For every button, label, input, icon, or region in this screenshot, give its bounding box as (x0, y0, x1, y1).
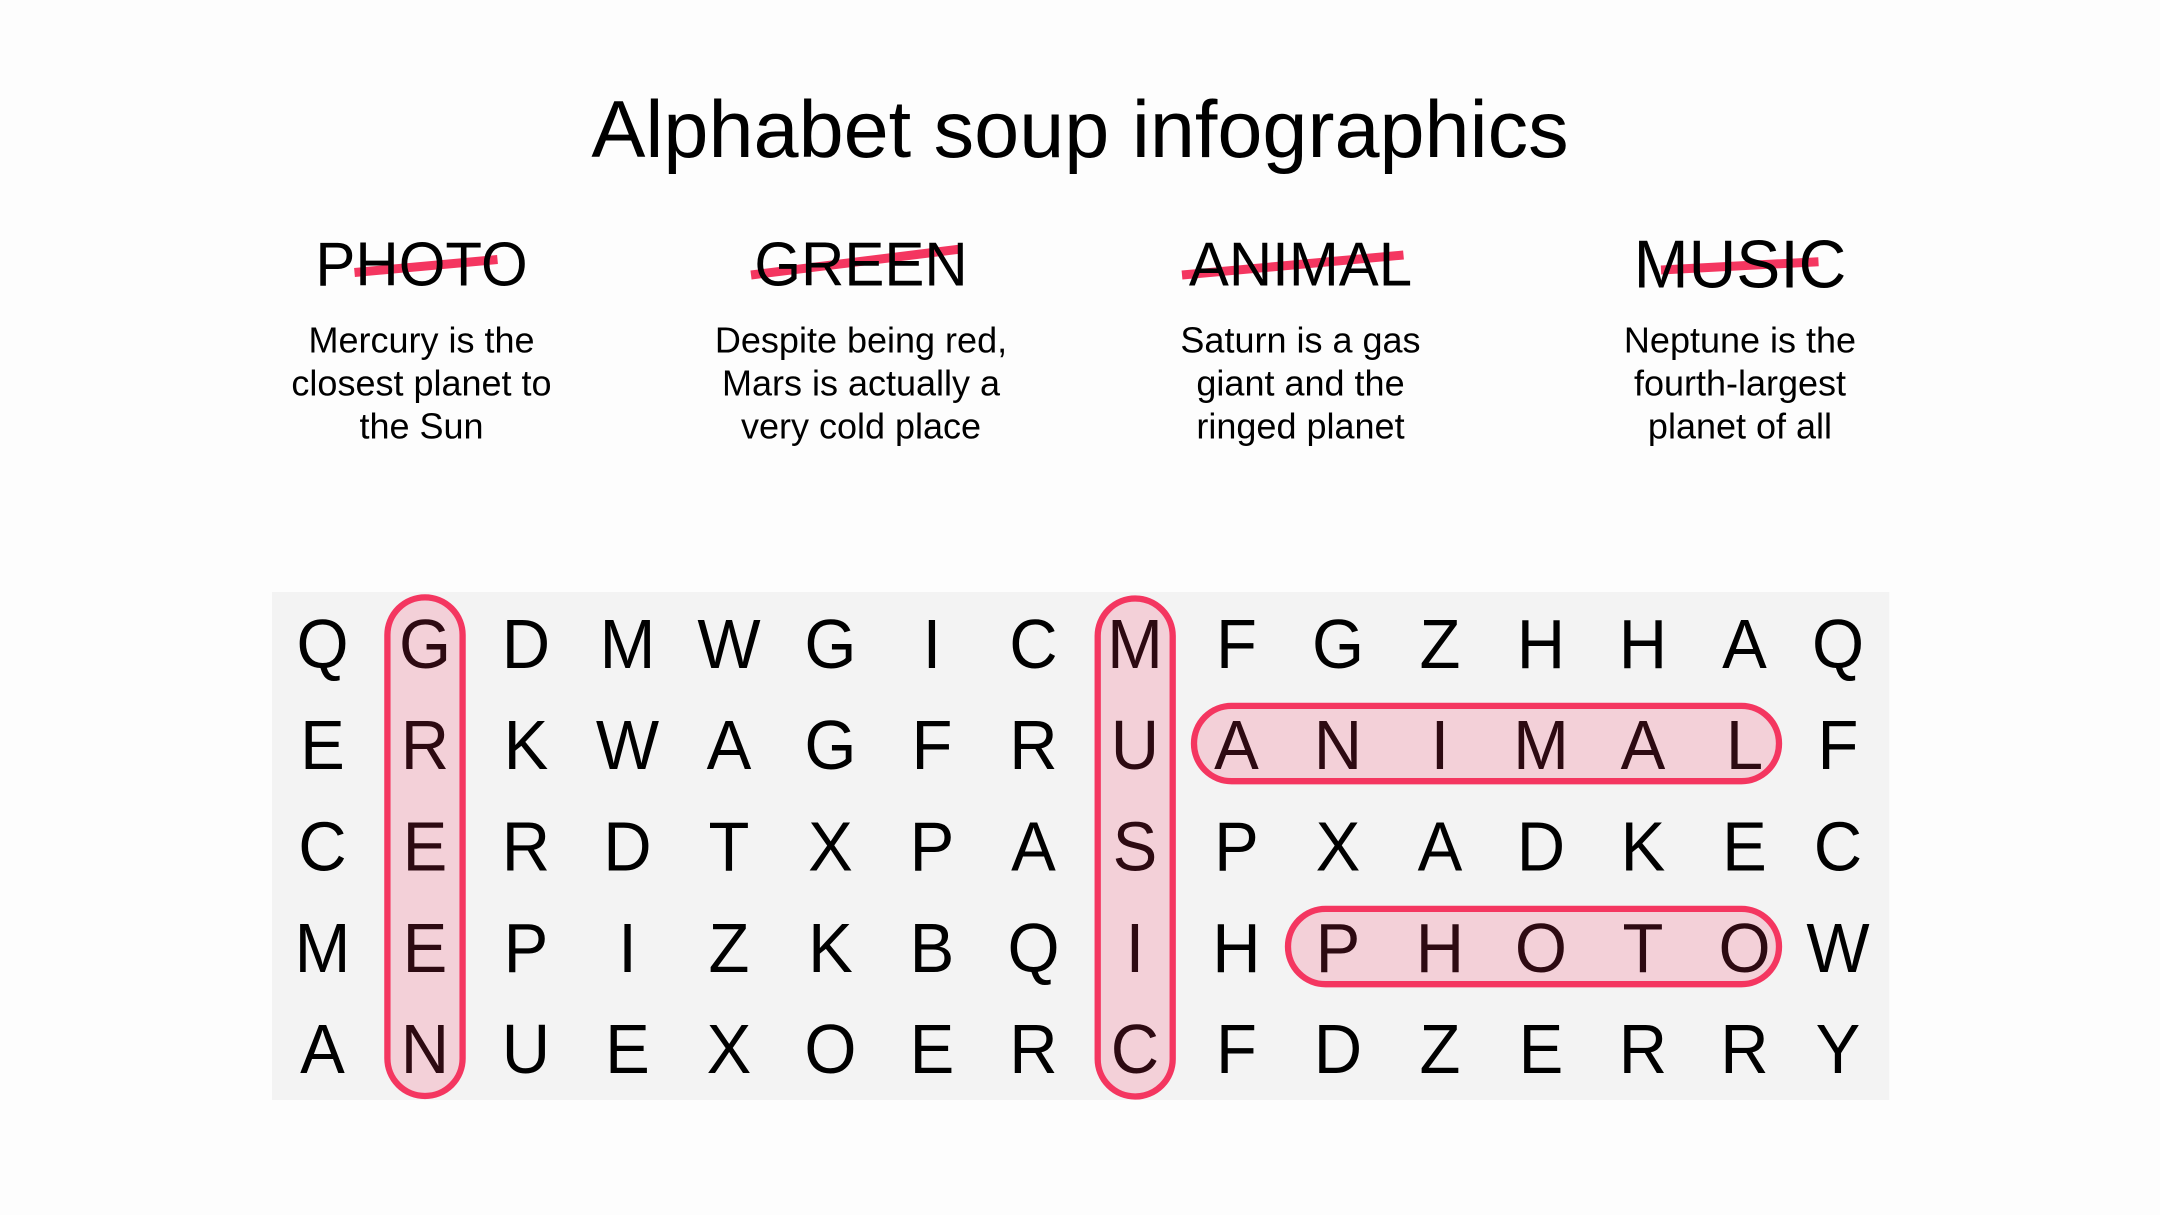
panel: clue photo (291, 230, 552, 446)
panel: clue music (1624, 226, 1856, 446)
word: animal: ANIMAL (1189, 230, 1412, 299)
panel: clue green (715, 229, 1007, 446)
word: music: MUSIC (1634, 226, 1846, 303)
highlight: ANIMAL (1194, 706, 1779, 781)
description: mars: Despite being red, (715, 319, 1007, 360)
panel: clue animal (1180, 230, 1421, 446)
panel: word search grid (272, 592, 1889, 1100)
word: photo: PHOTO (315, 230, 528, 299)
row 5 letters: ANUEXOERCFDZERRY (300, 1010, 1860, 1088)
description: mercury: Mercury is the (308, 319, 535, 360)
highlight: MUSIC (1098, 598, 1173, 1096)
description: mars: very cold place (741, 405, 981, 446)
description: saturn: Saturn is a gas (1180, 319, 1421, 360)
strike: photo (354, 260, 498, 272)
description: neptune: Neptune is the (1624, 319, 1856, 360)
description: neptune: fourth-largest (1634, 362, 1846, 403)
description: mercury: the Sun (359, 405, 484, 446)
highlight: GREEN (387, 597, 463, 1096)
row 4 letters: MEPIZKBQIHPHOTOW (295, 908, 1870, 987)
strike: green (751, 249, 961, 275)
description: neptune: planet of all (1648, 405, 1832, 446)
description: saturn: giant and the (1196, 362, 1405, 403)
strike: music (1661, 262, 1818, 270)
word: green: GREEN (754, 229, 968, 299)
strike: animal (1182, 255, 1404, 275)
description: mercury: closest planet to (291, 362, 552, 403)
grid background (272, 592, 1889, 1100)
letter grid (295, 605, 1870, 1088)
description: saturn: ringed planet (1196, 405, 1405, 446)
row 3 letters: CERDTXPASPXADKEC (298, 807, 1862, 886)
description: mars: Mars is actually a (722, 362, 1001, 403)
row 1 letters: QGDMWGICMFGZHHAQ (296, 605, 1864, 683)
row 2 letters: ERKWAGFRUANIMALF (300, 706, 1858, 785)
highlight: PHOTO (1288, 909, 1779, 984)
title: Alphabet soup infographics (591, 85, 1569, 175)
